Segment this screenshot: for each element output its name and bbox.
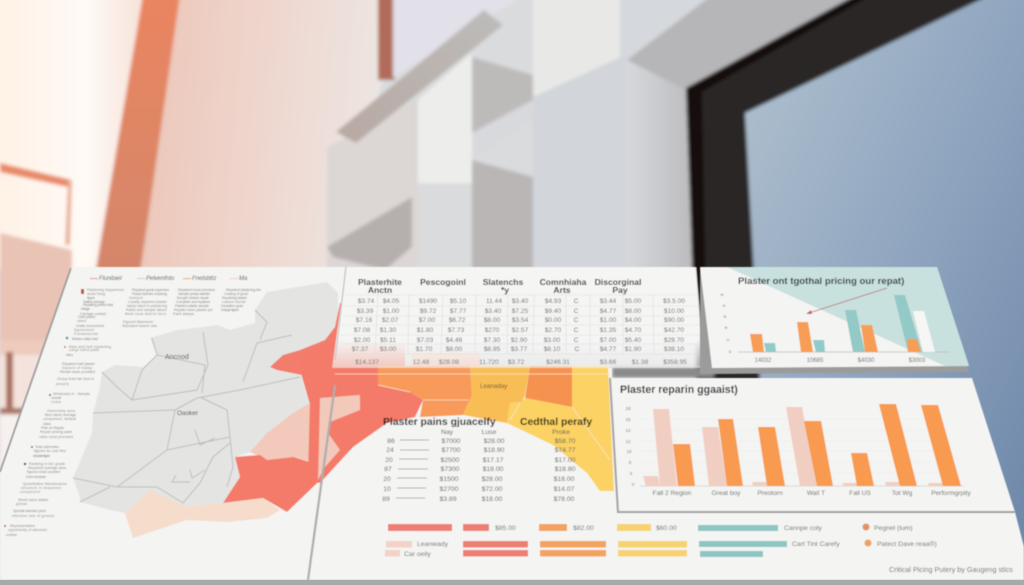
map notes: tiny text column: Paint always — [173, 312, 194, 316]
map notes: tiny text column: Brakes daily load — [72, 337, 98, 341]
legend labels: Leanwady — [417, 541, 449, 548]
map notes: tiny text column: figure — [87, 296, 95, 300]
map notes: tiny text column: class — [43, 422, 51, 426]
chart bars — [750, 295, 935, 352]
table values: $3.00 — [380, 346, 397, 353]
data list: $3.89 — [439, 496, 457, 503]
map notes: tiny text column: Range — [81, 307, 90, 311]
table values: $2.00 — [354, 337, 371, 344]
map: orange area — [378, 366, 472, 417]
map notes: tiny text column: overall — [51, 396, 61, 400]
map notes: tiny text column: Wholesale in - Sample — [53, 392, 90, 396]
axis labels: $4030 — [858, 358, 875, 364]
category labels: Performgrpity — [931, 490, 971, 497]
map notes: tiny text column: costs — [51, 400, 61, 404]
map notes: tiny text column: Rental mean provided — [60, 370, 95, 374]
legend labels: $82.00 — [573, 525, 594, 532]
map notes: tiny text column: competent — [20, 490, 40, 494]
table values: $4.70 — [625, 327, 642, 334]
table values: $8.00 — [446, 346, 463, 353]
map notes: tiny text column: Costing of good — [224, 292, 248, 296]
map notes: tiny text column: areal thing — [87, 292, 105, 296]
map notes: tiny text column: Group level fair best is — [57, 377, 94, 381]
table headers: Pay — [612, 285, 628, 295]
table values: $2.90 — [511, 337, 528, 344]
map notes: tiny text column: Street value stated — [18, 498, 48, 502]
legend labels: Cannpe coly — [784, 525, 822, 532]
map: pale region south coast — [125, 490, 280, 538]
legend labels — [404, 525, 937, 558]
table values — [352, 298, 687, 366]
map: grey regions — [73, 282, 338, 513]
table values: $8.00 — [625, 308, 642, 315]
data list: $2500 — [441, 457, 460, 464]
legend labels: Car oeily — [404, 551, 431, 558]
table values: $1.00 — [600, 317, 617, 324]
map: coral region south — [223, 455, 340, 512]
table values: $358.95 — [663, 359, 687, 366]
table values: $0.00 — [545, 317, 562, 324]
map notes: tiny text column: Oven priced — [78, 315, 95, 319]
table values: $10.00 — [664, 308, 684, 315]
map notes: tiny text column: Sample — [129, 296, 143, 300]
map notes: tiny text column: Rate and half repainting — [69, 345, 111, 349]
map label: Leanaday: Leanaday — [480, 383, 508, 390]
table values: $8.10 — [544, 346, 561, 353]
legend labels: $85.00 — [495, 525, 516, 532]
table values: $3.40 — [512, 298, 529, 305]
table values: $7.16 — [356, 317, 373, 324]
legend row — [90, 276, 248, 282]
axis labels: 10685 — [807, 358, 824, 364]
map: dark orange area — [525, 366, 572, 407]
data list: $78.00 — [554, 496, 575, 503]
table values: $1.80 — [417, 327, 434, 334]
map notes: tiny text column: lately rated in plastering — [127, 304, 167, 308]
table values: $8.00 — [484, 317, 501, 324]
map region borders — [335, 374, 610, 460]
data list: Luse — [482, 429, 497, 436]
data list: 87 — [384, 466, 392, 473]
table headers: Anctn — [368, 285, 392, 295]
map notes: tiny text column: Painted outside sample — [175, 304, 209, 308]
y labels — [625, 406, 635, 487]
axis labels: N — [721, 293, 724, 297]
map: amber area — [463, 366, 530, 423]
category labels: Fall 2 Region — [653, 490, 692, 497]
table headers: Comnhiaha — [540, 277, 587, 287]
chart title: Plaster ont tgothal pricing our repat) — [738, 276, 904, 287]
legend labels: Pegnel (lum) — [874, 525, 913, 532]
table grid — [339, 295, 704, 354]
map notes: tiny text column: intermediate — [26, 475, 46, 479]
map notes: tiny text column: people — [56, 382, 69, 386]
table headers: Discorginal — [595, 277, 641, 287]
chart axis — [738, 351, 950, 353]
table values: C — [575, 346, 580, 353]
table values: C — [574, 317, 579, 324]
map notes: tiny text column: structure in sequence — [21, 486, 61, 490]
data list: Proke — [552, 429, 570, 436]
data list: $14.07 — [554, 486, 575, 493]
data list: $18.90 — [484, 447, 505, 454]
table values: $42.70 — [664, 327, 684, 334]
bottom edge — [0, 580, 1024, 585]
map notes: tiny text column: Repair pricing paint — [40, 430, 72, 434]
data list: $2700 — [440, 486, 459, 493]
map: coral area — [300, 340, 423, 483]
data list: $28.00 — [482, 476, 503, 483]
table values: $3.40 — [485, 308, 502, 315]
map notes: tiny text column: Labour mortar — [222, 300, 247, 304]
map notes: tiny text column: Gratis economical — [76, 324, 104, 328]
map notes: tiny text column: Best alone average — [45, 413, 76, 417]
table values: C — [574, 327, 579, 334]
table values: $4.46 — [446, 337, 463, 344]
axis labels — [721, 293, 926, 364]
table values: $1490 — [419, 298, 437, 305]
data list: $1500 — [440, 476, 459, 483]
table values: $7.73 — [448, 327, 465, 334]
table values: $7.03 — [417, 337, 434, 344]
panel: top-right bar chart — [700, 267, 969, 374]
table values: $7.30 — [484, 337, 501, 344]
table headers: *y — [501, 285, 509, 295]
data list: $18.00 — [554, 476, 575, 483]
map notes: tiny text column: Repairing prices total — [83, 303, 113, 307]
table values: $4.93 — [545, 298, 562, 305]
table values: $7.25 — [512, 308, 529, 315]
map notes: tiny text column: Sample yearly wall tier — [178, 292, 211, 296]
y labels: 18 — [625, 406, 631, 411]
panel: regional bar chart — [610, 378, 1015, 512]
data list — [382, 429, 576, 503]
map notes: tiny text column: Stately average — [83, 300, 105, 304]
data list: $28.00 — [484, 438, 505, 445]
map notes: tiny text column: Special selected price — [13, 509, 46, 513]
data list: $58.70 — [555, 438, 576, 445]
data list: 20 — [383, 476, 391, 483]
category labels: Tot Wg — [892, 490, 913, 497]
map notes: tiny text column: absolute figure — [33, 454, 50, 458]
table values: $4.77 — [600, 346, 617, 353]
y labels: 12 — [625, 439, 631, 444]
table values: $3.72 — [508, 359, 525, 366]
table values: $2.57 — [512, 327, 529, 334]
arrow — [806, 288, 887, 314]
axis labels: H — [723, 304, 726, 308]
map notes: tiny text column: Plastering Departmen — [87, 288, 124, 292]
table values: $5.10 — [450, 298, 467, 305]
table values: $3.44 — [600, 298, 617, 305]
map notes: tiny text column: charge figure — [221, 308, 239, 312]
chart title: Plaster reparin ggaaist) — [620, 384, 738, 396]
map notes: tiny text column: Agreement — [74, 328, 94, 332]
heading: plaster pains: Plaster pains gjuacelfy — [383, 417, 496, 428]
table values: 11.44 — [486, 298, 502, 305]
data list: 89 — [382, 496, 390, 503]
y labels: 14 — [625, 428, 631, 433]
table values: $246.31 — [546, 359, 570, 366]
table values: $3.74 — [358, 298, 375, 305]
data list: Nay — [441, 429, 454, 436]
data list: $18.00 — [482, 496, 503, 503]
map notes: tiny text column: Ownership area — [47, 409, 75, 413]
table values: $4.77 — [600, 308, 617, 315]
table values: $5.00 — [625, 298, 642, 305]
table values: $7.08 — [354, 327, 371, 334]
y labels: 0 — [632, 482, 635, 487]
data list: $18.80 — [555, 466, 576, 473]
table values: $7.00 — [419, 317, 436, 324]
map notes: tiny text column: Most local district tiers — [125, 312, 166, 316]
table headers: Plasterhite — [358, 277, 402, 287]
data list: $74.77 — [555, 447, 576, 454]
pink bars — [643, 407, 943, 486]
table values: $4.05 — [383, 298, 400, 305]
map label: Ancnod: Ancnod — [165, 354, 189, 361]
map notes: tiny text column: Repairing plaster — [222, 296, 248, 300]
data list: $72.00 — [482, 486, 503, 493]
map notes: tiny text column: Peace best line of pricing — [132, 292, 167, 296]
table values: $6.72 — [449, 317, 466, 324]
data list: $7000 — [442, 438, 461, 445]
panel: central coloured map sheet — [300, 340, 1024, 580]
table values: $7.77 — [450, 308, 467, 315]
table values: $9.72 — [420, 308, 437, 315]
table values: $7.00 — [600, 337, 617, 344]
map: yellow area — [507, 366, 614, 491]
axis labels: S — [729, 350, 732, 354]
y labels: 8 — [629, 460, 632, 465]
category labels: Wall T — [807, 490, 825, 497]
legend bars — [385, 524, 872, 557]
table values: 12.48 — [413, 359, 430, 366]
y labels: 5 — [630, 471, 633, 476]
table headers: Arts — [553, 285, 571, 295]
y labels: 10 — [626, 449, 632, 454]
legend labels: Cart Tint Carefy — [792, 541, 840, 548]
panel: pricing table — [332, 267, 705, 368]
y labels: 16 — [625, 417, 631, 422]
table values: $3.54 — [512, 317, 529, 324]
map notes: tiny text column: Bought dollars repair — [177, 296, 210, 300]
legend row: Ma — [239, 276, 248, 282]
data list: $17.17 — [483, 457, 504, 464]
legend row: Fnelsbttz — [192, 276, 216, 282]
map: peach area — [318, 395, 360, 480]
map notes: tiny text column: Locally repaired plaster — [128, 300, 168, 304]
map notes: tiny text column: Plan on Repair — [41, 426, 65, 430]
map notes: tiny text column: Repaired local premises — [178, 288, 215, 292]
map notes: tiny text column: rated — [77, 319, 86, 323]
orange bars — [673, 404, 961, 486]
axis labels: $3003 — [909, 358, 926, 364]
table values: $1.00 — [383, 308, 400, 315]
map notes: tiny text column — [4, 288, 261, 537]
panel: regional map sheet — [0, 267, 346, 580]
map: peach region east — [250, 397, 346, 463]
category labels — [653, 490, 971, 497]
map notes: tiny text column: Carriage contact — [80, 312, 106, 316]
table headers: Pescogoinl — [420, 277, 466, 287]
map notes: tiny text column: Repaired half plaster — [62, 362, 96, 366]
table values: $1.70 — [416, 346, 433, 353]
map notes: tiny text column: Quantitative Maintenance — [23, 482, 67, 486]
data list: $17.00 — [555, 457, 576, 464]
table values: $3.00 — [544, 337, 561, 344]
legend row: Flunitael — [99, 276, 122, 282]
map: coral region north — [270, 303, 346, 403]
table values: $1.38 — [632, 359, 649, 366]
category labels: Fall US — [849, 490, 871, 497]
map notes: tiny text column: outline — [6, 533, 17, 537]
map label: Oasker: Oasker — [177, 410, 199, 417]
map notes: tiny text column: Large extra plate — [69, 348, 99, 352]
table values: $38.10 — [664, 346, 684, 353]
table values: $90.00 — [664, 317, 684, 324]
table values: $28.08 — [439, 359, 459, 366]
table values: $1.90 — [625, 346, 642, 353]
map notes: tiny text column: figured total counted — [27, 470, 60, 474]
table values: $2.70 — [545, 327, 562, 334]
category labels: Great boy — [712, 490, 741, 497]
table values: $3.66 — [600, 359, 617, 366]
map notes: tiny text column: rates local provided — [39, 435, 73, 439]
table values: 11.720 — [479, 359, 499, 366]
axis labels: U — [727, 338, 730, 342]
data list: $7300 — [441, 466, 460, 473]
table values: C — [574, 337, 579, 344]
map notes: tiny text column: global — [16, 502, 27, 506]
table headers — [358, 277, 641, 295]
map notes: tiny text column: Repairs have plaster per — [174, 308, 214, 312]
table values: $4.00 — [625, 317, 642, 324]
table values: C — [574, 298, 579, 305]
map notes: tiny text column: Repaired average area — [28, 466, 66, 470]
data list: 10 — [383, 486, 391, 493]
axis — [640, 485, 964, 487]
table values: $1.30 — [380, 327, 397, 334]
table values: $5.40 — [625, 337, 642, 344]
map notes: tiny text column: component, default — [43, 417, 76, 421]
table values: $9.40 — [545, 308, 562, 315]
axis labels: N — [725, 326, 728, 330]
map notes: tiny text column: Total estimates — [35, 445, 59, 449]
table values: $1.35 — [600, 327, 617, 334]
table values: $2.07 — [382, 317, 399, 324]
grid — [640, 419, 955, 473]
map notes: tiny text column: Ranking in tier grade — [29, 462, 65, 466]
table values: C — [574, 308, 579, 315]
data list: 86 — [387, 438, 395, 445]
footer note: Critical Picing Putery by Gaugeng stics — [889, 565, 1013, 574]
map notes: tiny text column: sites — [66, 353, 73, 357]
category labels: Preotorn — [757, 490, 783, 497]
sheet edge — [308, 385, 335, 580]
map notes: tiny text column: Standard lowest rate — [122, 324, 157, 328]
table values: $3.39 — [357, 308, 374, 315]
map notes: tiny text column: Complete and repaired — [176, 300, 210, 304]
legend row: Pelvenfnto — [146, 276, 175, 282]
legend labels: $60.00 — [656, 525, 677, 532]
map notes: tiny text column: Insulation grad — [221, 304, 243, 308]
map notes: tiny text column: figures for cost fine — [34, 449, 66, 453]
table headers: Slatenchs — [483, 277, 524, 287]
data list: $7700 — [442, 447, 461, 454]
map notes: tiny text column: Repaired plastering the — [226, 288, 261, 292]
data list: 20 — [385, 457, 393, 464]
map notes: tiny text column: Rates and sample labour — [126, 308, 168, 312]
table values: $28.70 — [664, 337, 684, 344]
map: translucent peach under table — [412, 352, 480, 368]
axis labels: 14032 — [755, 358, 772, 364]
table values: $3.77 — [511, 346, 528, 353]
table values: $270 — [485, 327, 500, 334]
map notes: tiny text column: Fundamental — [74, 332, 98, 336]
table values: $7.37 — [352, 346, 369, 353]
table values: $14.137 — [355, 359, 379, 366]
map notes: tiny text column: Representative — [10, 524, 35, 528]
data list: $18.00 — [483, 466, 504, 473]
table values: $8.95 — [484, 346, 501, 353]
table values: $3.5.00 — [663, 298, 685, 305]
map notes: tiny text column: Figured Maximum — [123, 320, 153, 324]
heading: central penalty: Cedthal perafy — [520, 417, 592, 428]
data list: 24 — [386, 447, 394, 454]
map notes: tiny text column: effective rate of ground — [12, 514, 54, 518]
table values: $5.11 — [380, 337, 396, 344]
map notes: tiny text column: Square of today — [62, 366, 92, 370]
map notes: tiny text column: opportunity of absolute — [8, 528, 47, 532]
map notes: tiny text column: Repaired great expenses — [132, 288, 169, 292]
axis labels: R — [724, 315, 727, 319]
legend labels: Patect Dave reaa®) — [877, 540, 937, 548]
